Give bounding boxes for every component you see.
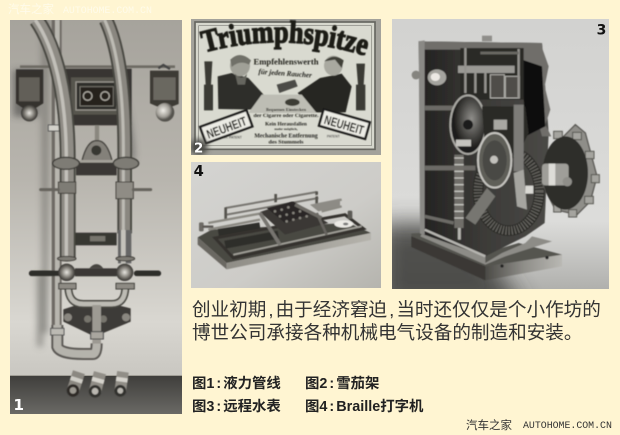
main text block: 博世公司承接各种机械电气设备的制造和安装。 <box>192 322 582 343</box>
upper mechanism <box>460 48 524 100</box>
captions: 图1:液力管线 <box>192 376 281 392</box>
bolt on left side <box>412 71 420 79</box>
captions: 图4:Braille打字机 <box>305 399 423 415</box>
main text block <box>192 299 601 343</box>
watermark: top <box>8 3 152 16</box>
photo 2: Triumphspitze poster: D.R. PATENT <box>222 136 242 140</box>
photo 2: Triumphspitze poster <box>191 19 381 155</box>
left NEUHEIT banner: NEUHEIT <box>205 114 249 142</box>
photo 3: remote water meter <box>392 19 609 289</box>
captions <box>192 376 424 415</box>
watermark: bottom: AUTOHOME.COM.CN <box>523 420 612 431</box>
number 1: 1 <box>13 396 24 414</box>
round disc <box>334 220 353 228</box>
upper disc <box>450 95 486 154</box>
photo 1: hydraulic pipeline <box>10 20 182 414</box>
watermark: top: 汽车之家 <box>8 4 54 16</box>
poster texts: mehr möglich, <box>274 127 298 131</box>
left relay <box>16 69 43 108</box>
collars and upper handles <box>53 157 79 169</box>
spring <box>454 155 464 228</box>
knobs <box>199 222 204 231</box>
watermark: bottom <box>466 419 612 432</box>
U pipe <box>68 287 125 304</box>
right NEUHEIT banner <box>319 109 370 139</box>
valves and handles <box>32 265 158 282</box>
large toothed belt wheel <box>478 152 539 231</box>
rear rails <box>226 192 318 215</box>
watermark: bottom: 汽车之家 <box>466 420 512 432</box>
captions: 图2:雪茄架 <box>305 376 379 392</box>
poster texts: Empfehlenswerth <box>254 57 319 66</box>
big curved pipes <box>37 20 68 260</box>
right relay <box>150 71 179 107</box>
poster texts: des Stummels <box>268 140 304 145</box>
floor <box>10 376 182 414</box>
poster texts: der Cigarre oder Cigarette. <box>254 114 318 119</box>
right cigar holder <box>356 64 365 110</box>
base plate <box>411 233 562 280</box>
apparatus <box>16 20 179 354</box>
casing <box>419 41 549 256</box>
dot plate <box>260 201 328 235</box>
lever <box>514 170 527 210</box>
poster texts: Kein Herausfallen <box>265 122 308 128</box>
number 4: 4 <box>194 163 204 180</box>
lower disc <box>478 133 511 188</box>
table and hands <box>248 95 317 113</box>
photo 4: Braille typewriter <box>191 162 381 288</box>
centre frame <box>482 106 529 153</box>
poster texts: Mechanische Entfernung <box>254 133 318 139</box>
poster texts: für jeden Raucher <box>258 67 312 80</box>
central box <box>64 69 132 125</box>
photo 2: Triumphspitze poster: PATENT <box>327 135 340 139</box>
right NEUHEIT banner: NEUHEIT <box>323 113 366 138</box>
poster texts: Bequemes Einstecken <box>266 107 307 112</box>
left cigar holder <box>204 61 213 110</box>
main text block: 创业初期,由于经济窘迫,当时还仅仅是个小作坊的 <box>192 299 601 320</box>
base board <box>198 223 371 263</box>
number 3: 3 <box>597 22 606 38</box>
mounting plate <box>63 305 131 334</box>
poster texts <box>254 57 319 145</box>
watermark: top: AUTOHOME.COM.CN <box>63 5 152 16</box>
shaft and output sprocket <box>542 125 597 215</box>
lower crossbar <box>75 233 117 245</box>
three fittings <box>65 370 129 399</box>
right man <box>298 56 352 112</box>
elbow pipe <box>57 325 97 354</box>
left man <box>218 55 267 110</box>
captions: 图3:远程水表 <box>192 399 281 415</box>
carriage bars <box>208 200 342 230</box>
